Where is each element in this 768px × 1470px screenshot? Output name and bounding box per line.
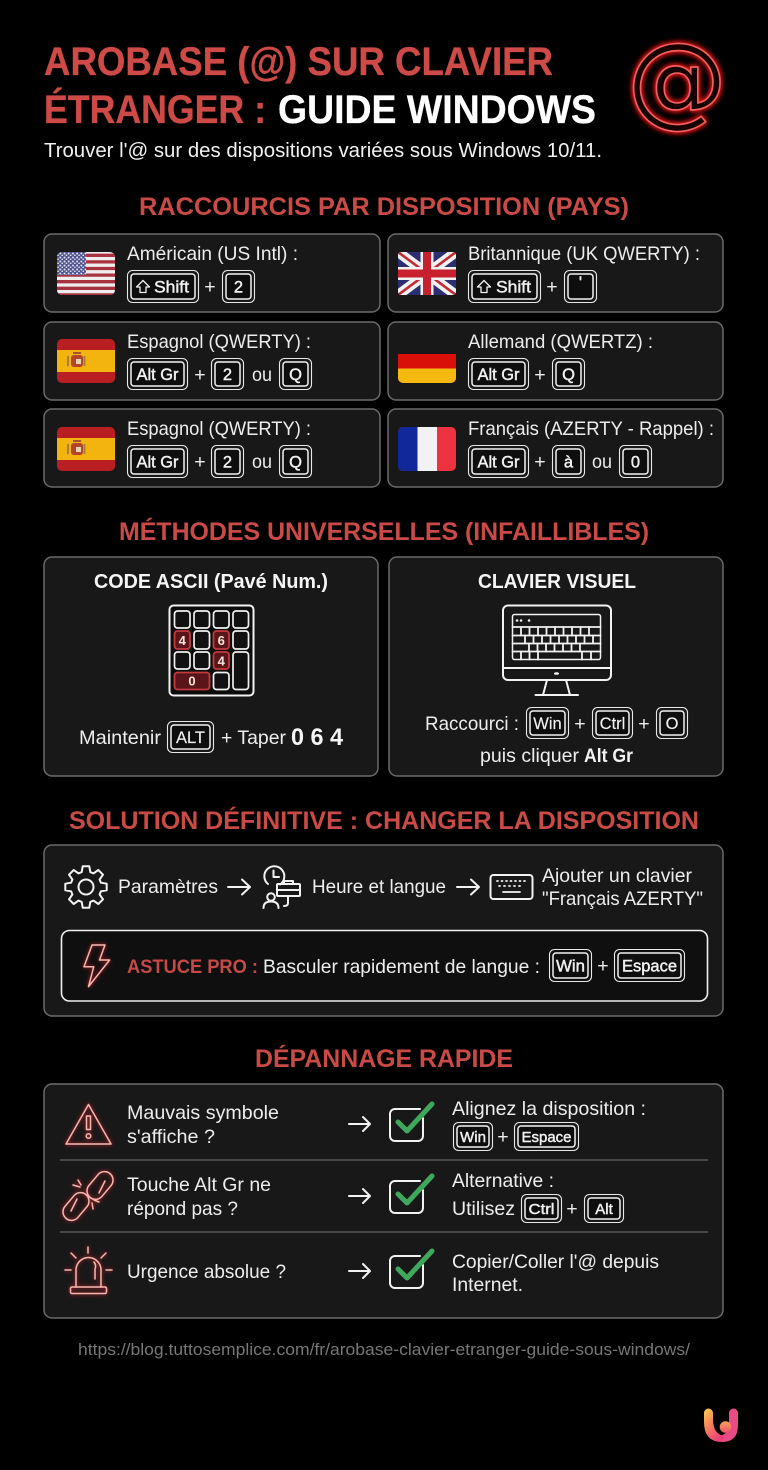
solution 2: [452, 1170, 554, 1220]
panel: espagnol 2: [44, 409, 380, 487]
key: ctrl: [522, 1194, 562, 1222]
plus: +: [546, 276, 558, 298]
heading: raccourcis: RACCOURCIS PAR DISPOSITION (PAYS): [139, 193, 629, 221]
key: alt gr: [128, 358, 188, 390]
plus: +: [194, 364, 206, 386]
follow-up text: puis cliquer: [480, 745, 580, 767]
problem 1: Mauvais symbole: [127, 1102, 279, 1124]
source url: https://blog.tuttosemplice.com/fr/arobase-clavier-etranger-guide-sous-windows/: [78, 1340, 690, 1359]
icon: Spain flag: [57, 427, 115, 471]
follow-up text: [480, 745, 633, 767]
key: shift: Shift: [154, 278, 189, 296]
icon: check 3: [390, 1251, 432, 1288]
key: shift: [128, 270, 198, 302]
arrow: [349, 1117, 370, 1131]
key: alt: Alt: [595, 1201, 614, 1218]
problem 2: répond pas ?: [127, 1198, 238, 1220]
key: Q: Q: [562, 366, 575, 384]
key: O: [656, 708, 688, 738]
plus: +: [204, 276, 216, 298]
key: 0: 0: [631, 454, 640, 472]
icon: warning: [66, 1104, 111, 1144]
panel: allemand: [388, 322, 723, 400]
icon: broken link: [60, 1168, 116, 1224]
logo: [704, 1408, 738, 1442]
solution 3: Copier/Coller l'@ depuis: [452, 1251, 659, 1273]
problem 2: Touche Alt Gr ne: [127, 1174, 271, 1196]
key: alt gr: [468, 358, 528, 390]
key: win: [550, 950, 592, 982]
key: ctrl: Ctrl: [600, 715, 625, 733]
label: Ajouter un clavier: [542, 865, 692, 887]
title: AROBASE (@) SUR CLAVIER: [44, 40, 553, 84]
key: ctrl: [592, 708, 632, 738]
key: win: Win: [460, 1129, 486, 1146]
plus: +: [534, 451, 546, 473]
key: Q: [280, 358, 312, 390]
icon: Spain flag: [57, 339, 115, 383]
heading: CODE ASCII (Pavé Num.): [94, 571, 328, 593]
key: alt gr: [468, 446, 528, 478]
code 0 6 4: 0 6 4: [291, 724, 344, 751]
icon: neon at sign: @: [627, 21, 727, 138]
key: 0: [620, 446, 652, 478]
label: Britannique (UK QWERTY) :: [468, 243, 700, 265]
solution 2: Utilisez: [452, 1198, 515, 1220]
key: 2: 2: [223, 366, 232, 384]
problem 1: [127, 1102, 279, 1148]
text: Basculer rapidement de langue :: [263, 956, 540, 978]
key: Q: [552, 358, 584, 390]
panel: code ascii: [44, 557, 378, 776]
problem 1: s'affiche ?: [127, 1126, 215, 1148]
plus: +: [597, 955, 609, 977]
heading: méthodes: MÉTHODES UNIVERSELLES (INFAILLIBLES): [119, 517, 649, 546]
plus: +: [638, 713, 650, 735]
icon: Germany flag: [398, 354, 456, 383]
key: shift: [468, 270, 540, 302]
plus: +: [497, 1126, 509, 1148]
key: à: à: [564, 454, 574, 472]
icon: gear: [65, 866, 107, 908]
key: 2: [212, 358, 244, 390]
title: ÉTRANGER :: [44, 87, 266, 132]
plus: +: [566, 1198, 578, 1220]
panel: britannique: [388, 234, 723, 312]
label: Espagnol (QWERTY) :: [127, 418, 311, 440]
key: espace: [614, 950, 684, 982]
follow-up text: Alt Gr: [584, 745, 633, 767]
key: alt: [168, 722, 214, 752]
title: [44, 40, 596, 132]
title: GUIDE WINDOWS: [278, 88, 596, 132]
icon: lightning: [84, 945, 110, 987]
panel: clavier visuel: [389, 557, 723, 776]
panel: espagnol 1: [44, 322, 380, 400]
problem 3: Urgence absolue ?: [127, 1261, 286, 1283]
label: ASTUCE PRO :: [127, 956, 258, 978]
panel: solution: [44, 845, 723, 1016]
key: alt gr: Alt Gr: [478, 454, 520, 472]
key: alt gr: Alt Gr: [136, 366, 179, 384]
plus: +: [194, 451, 206, 473]
solution 3: Internet.: [452, 1274, 523, 1296]
subtitle: Trouver l'@ sur des dispositions variées sous Windows 10/11.: [44, 139, 602, 162]
panel: américain: [44, 234, 380, 312]
key: espace: Espace: [522, 1129, 572, 1146]
label: "Français AZERTY": [542, 888, 703, 910]
icon: numeric keypad: 4: [179, 633, 187, 648]
icon: keyboard: [490, 875, 532, 899]
problem 2: [127, 1174, 271, 1220]
callout: astuce pro: [62, 930, 708, 1001]
key: alt: ALT: [176, 729, 205, 747]
instruction: + Taper: [221, 727, 287, 749]
instruction: Maintenir: [79, 727, 162, 749]
icon: monitor with keyboard: [503, 606, 611, 695]
key: à: [552, 446, 584, 478]
icon: numeric keypad: 0: [188, 674, 196, 688]
key: apostrophe: ': [579, 274, 582, 292]
key: alt gr: Alt Gr: [478, 366, 520, 384]
label: Paramètres: [118, 876, 218, 898]
icon: US flag: [57, 252, 115, 295]
label: Espagnol (QWERTY) :: [127, 331, 311, 353]
key: win: [454, 1122, 492, 1150]
key: espace: Espace: [622, 958, 677, 976]
icon: check 2: [390, 1176, 432, 1213]
label: [542, 865, 703, 910]
ou: ou: [252, 451, 272, 473]
heading: dépannage: DÉPANNAGE RAPIDE: [255, 1044, 513, 1073]
arrow: [349, 1189, 370, 1203]
key: O: O: [666, 715, 679, 733]
icon: siren: [65, 1247, 112, 1294]
key: 2: [222, 270, 254, 302]
key: shift: Shift: [496, 278, 531, 296]
icon: UK flag: [398, 252, 456, 295]
key: espace: [514, 1122, 578, 1150]
arrow: [349, 1264, 370, 1278]
key: alt: [584, 1194, 624, 1222]
key: Q: Q: [289, 454, 302, 472]
icon: check 1: [390, 1104, 432, 1141]
panel: français: [388, 409, 723, 487]
arrow: [228, 880, 250, 894]
key: Q: Q: [289, 366, 302, 384]
icon: clock and person: [264, 866, 300, 908]
key: Q: [280, 446, 312, 478]
icon: France flag: [398, 427, 456, 471]
ou: ou: [592, 451, 612, 473]
key: win: Win: [556, 958, 585, 976]
icon: numeric keypad: 4: [218, 654, 226, 668]
solution 1: Alignez la disposition :: [452, 1098, 646, 1120]
icon: numeric keypad: 6: [218, 633, 225, 648]
heading: solution: SOLUTION DÉFINITIVE : CHANGER LA DISPOSITION: [69, 806, 699, 835]
label: Allemand (QWERTZ) :: [468, 331, 653, 353]
key: 2: [212, 446, 244, 478]
solution 3: [452, 1251, 659, 1296]
panel: dépannage: [44, 1084, 723, 1318]
key: 2: 2: [234, 278, 243, 296]
key: alt gr: [128, 446, 188, 478]
plus: +: [534, 364, 546, 386]
key: 2: 2: [223, 454, 232, 472]
plus: +: [574, 713, 586, 735]
ou: ou: [252, 364, 272, 386]
heading: CLAVIER VISUEL: [478, 571, 636, 593]
label: Français (AZERTY - Rappel) :: [468, 418, 714, 440]
label: Américain (US Intl) :: [127, 243, 298, 265]
key: apostrophe: [564, 270, 596, 302]
shortcut text: Raccourci :: [425, 713, 519, 735]
key: alt gr: Alt Gr: [136, 454, 179, 472]
key: win: Win: [533, 715, 562, 733]
solution 2: Alternative :: [452, 1170, 554, 1192]
key: win: [526, 708, 568, 738]
icon: numeric keypad: [170, 606, 254, 696]
label: Heure et langue: [312, 876, 446, 898]
arrow: [457, 880, 479, 894]
key: ctrl: Ctrl: [528, 1201, 554, 1218]
